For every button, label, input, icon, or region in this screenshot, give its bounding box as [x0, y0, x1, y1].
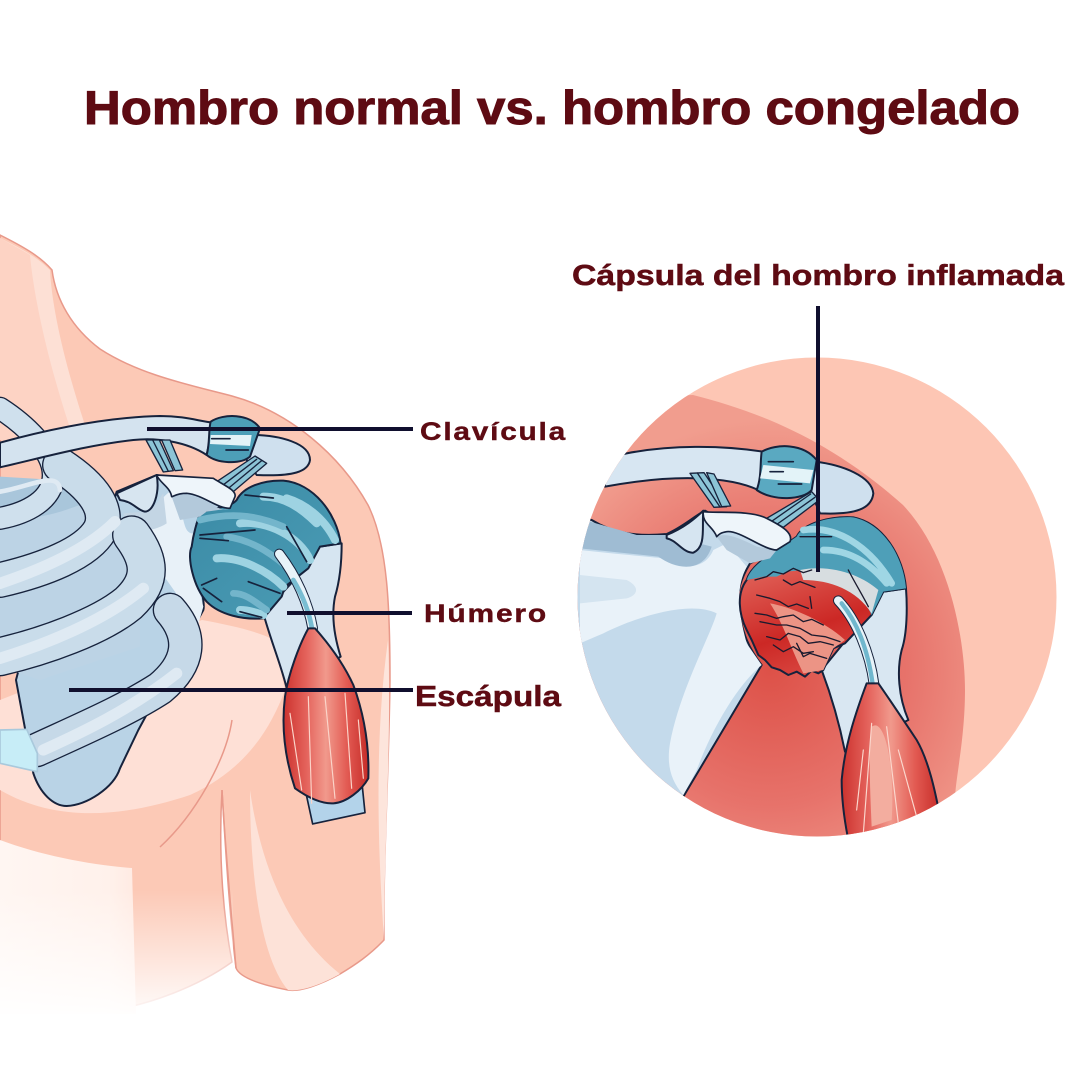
illustration: frozen shoulder circle	[560, 357, 1057, 860]
clavicle	[603, 447, 763, 490]
cartilage	[0, 729, 37, 772]
lower humerus shaft	[306, 780, 365, 824]
inflamed capsule	[740, 517, 906, 677]
label: clavícula: Clavícula	[420, 418, 567, 446]
label: húmero: Húmero	[424, 600, 548, 628]
biceps tendon	[838, 601, 874, 684]
title: Hombro normal vs. hombro congelado	[84, 81, 1020, 134]
humeral head capsule	[190, 481, 341, 619]
clavicle	[0, 416, 213, 467]
ligaments	[690, 473, 819, 527]
biceps muscle	[283, 628, 368, 803]
rib cage	[0, 408, 185, 750]
biceps tendon	[279, 554, 313, 628]
inflamed tissue area	[560, 395, 965, 860]
acromion	[247, 435, 310, 475]
acromioclavicular joint	[207, 416, 260, 462]
biceps muscle	[842, 683, 940, 840]
illustration: normal shoulder	[0, 235, 567, 1016]
humerus	[263, 543, 342, 688]
body skin silhouette	[0, 235, 390, 1016]
label: cápsula del hombro inflamada: Cápsula del hombro inflamada	[572, 260, 1065, 292]
acromioclavicular joint	[757, 446, 817, 498]
circle background	[577, 357, 1057, 837]
scapula	[16, 475, 233, 806]
ligaments	[146, 440, 267, 492]
scapula	[578, 510, 766, 796]
coracoid process	[157, 475, 235, 520]
coracoid process	[703, 512, 791, 563]
label: escápula: Escápula	[415, 681, 562, 713]
humerus	[822, 588, 908, 752]
acromion	[810, 462, 873, 514]
